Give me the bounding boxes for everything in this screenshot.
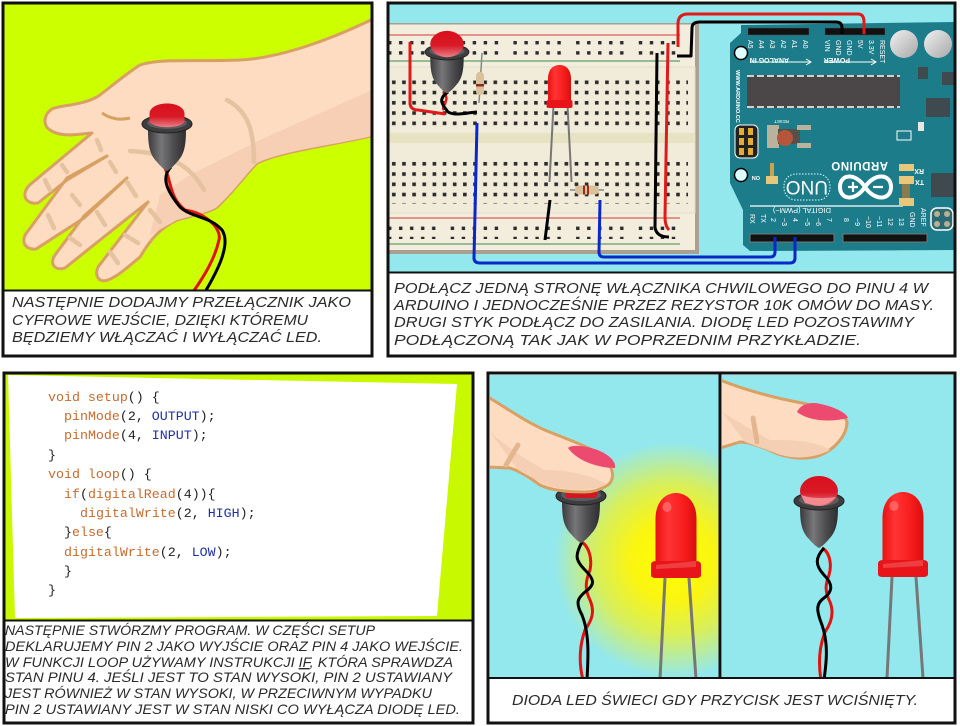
arduino board: ANALOG IN — [750, 56, 789, 63]
caption: panel 2: DRUGI STYK PODŁĄCZ DO ZASILANIA. DIODĘ LED POZOSTAWIMY — [394, 314, 915, 331]
arduino board: ARDUINO — [831, 159, 888, 171]
code listing: } — [48, 448, 56, 463]
arduino board: A4 — [757, 40, 764, 49]
scene: button pressed, LED lit — [490, 375, 718, 677]
breadboard — [388, 23, 699, 254]
arduino board: 3.3V — [867, 40, 874, 55]
arduino board: 4 — [791, 218, 798, 222]
wires: jumper wires — [410, 14, 864, 263]
caption text: DIODA LED ŚWIECI GDY PRZYCISK JEST WCIŚNIĘTY. — [512, 691, 918, 709]
arduino board: A1 — [790, 40, 797, 49]
arduino board: 12 — [886, 218, 893, 226]
arduino board: WWW.ARDUINO.CC — [734, 70, 740, 123]
caption: panel 1: NASTĘPNIE DODAJMY PRZEŁĄCZNIK JAKO — [12, 294, 351, 311]
arduino board: 13 — [897, 218, 904, 226]
arduino board: GND — [845, 40, 852, 56]
arduino board: DIGITAL (PWM~) — [772, 206, 831, 215]
green background — [3, 3, 372, 290]
arduino board: 5V — [856, 40, 863, 49]
panel: program code — [4, 373, 473, 723]
icon: push button on breadboard — [425, 31, 469, 93]
caption: panel 1 — [3, 290, 372, 356]
caption: panel 3: PIN 2 USTAWIANY JEST W STAN NISKI CO WYŁĄCZA DIODĘ LED. — [5, 701, 460, 717]
code listing: } — [64, 564, 72, 579]
arduino board: 8 — [842, 218, 849, 222]
code listing: digitalWrite(2, HIGH); — [80, 506, 256, 521]
arduino board: TX — [915, 178, 924, 185]
arduino board: ~3 — [780, 218, 787, 226]
arduino board: ~10 — [864, 216, 871, 228]
caption: panel 4 — [489, 679, 954, 722]
icon: resistor horizontal — [570, 186, 604, 194]
arduino board: VIN — [823, 40, 830, 52]
scene: button released, LED off — [720, 373, 955, 680]
caption: panel 3: NASTĘPNIE STWÓRZMY PROGRAM. W CZĘŚCI SETUP — [5, 621, 376, 638]
arduino board: 7 — [825, 218, 832, 222]
caption: panel 3: JEST RÓWNIEŻ W STAN WYSOKI, W PRZECIWNYM WYPADKU — [4, 685, 433, 701]
code listing: digitalWrite(2, LOW); — [64, 545, 232, 560]
panel: breadboard wiring — [388, 3, 955, 356]
arduino board: ~6 — [814, 218, 821, 226]
arduino board: A5 — [746, 40, 753, 49]
arduino board: ON — [752, 174, 760, 180]
arduino board: POWER — [824, 56, 850, 63]
caption: panel 2: ARDUINO I JEDNOCZEŚNIE PRZEZ REZYSTOR 10K OMÓW DO MASY. — [393, 296, 934, 314]
illustration: hand with push button and wires — [24, 18, 375, 292]
arduino board: RX — [748, 214, 755, 224]
panel: LED on and off comparison — [488, 373, 955, 723]
caption: panel 3: STAN PINU 4. JEŚLI JEST TO STAN WYSOKI, PIN 2 USTAWIANY — [5, 668, 454, 685]
arduino board: TX — [759, 214, 766, 223]
arduino board: ~5 — [803, 218, 810, 226]
code listing: pinMode(4, INPUT); — [64, 428, 208, 443]
caption: panel 1: BĘDZIEMY WŁĄCZAĆ I WYŁĄCZAĆ LED. — [12, 329, 322, 346]
arduino board: GND — [908, 212, 915, 228]
icon: push button — [142, 104, 192, 171]
caption: panel 2: PODŁĄCZ JEDNĄ STRONĘ WŁĄCZNIKA CHWILOWEGO DO PINU 4 W — [394, 280, 930, 297]
code listing: } — [48, 583, 56, 598]
finger pressing — [488, 397, 615, 492]
caption: panel 3: W FUNKCJI LOOP UŻYWAMY INSTRUKCJI IF, KTÓRA SPRAWDZA — [5, 654, 453, 670]
icon: LED on breadboard — [546, 65, 572, 182]
code listing: }else{ — [64, 525, 112, 540]
caption: panel 2: PODŁĄCZONĄ TAK JAK W POPRZEDNIM PRZYKŁADZIE. — [394, 332, 861, 349]
arduino board: RESET — [878, 40, 885, 64]
code listing: if(digitalRead(4)){ — [64, 487, 216, 502]
arduino board: UNO — [786, 176, 828, 197]
arduino board: ~11 — [875, 216, 882, 227]
arduino board — [730, 22, 955, 251]
arduino board: ~9 — [853, 218, 860, 226]
caption: panel 3 — [4, 621, 463, 717]
caption: panel 2 — [393, 280, 934, 349]
code sheet — [8, 375, 457, 618]
code listing: pinMode(2, OUTPUT); — [64, 409, 216, 424]
caption: panel 3: DEKLARUJEMY PIN 2 JAKO WYJŚCIE ORAZ PIN 4 JAKO WEJŚCIE. — [5, 637, 463, 654]
code listing: void loop() { — [48, 467, 152, 482]
caption: panel 1: CYFROWE WEJŚCIE, DZIĘKI KTÓREMU — [12, 311, 308, 329]
arduino board: GND — [834, 40, 841, 56]
icon: resistor vertical — [476, 53, 484, 103]
arduino board: AREF — [919, 208, 926, 227]
arduino board: A2 — [779, 40, 786, 49]
code listing: void setup() { — [48, 390, 160, 405]
arduino board: RX — [914, 167, 924, 174]
panel: hand holding switch — [3, 3, 375, 356]
finger above button — [720, 380, 848, 458]
arduino board: 2 — [769, 218, 776, 222]
arduino board: RESET — [774, 119, 789, 124]
arduino board: A3 — [768, 40, 775, 49]
arduino board: A0 — [801, 40, 808, 49]
code listing — [48, 390, 256, 598]
